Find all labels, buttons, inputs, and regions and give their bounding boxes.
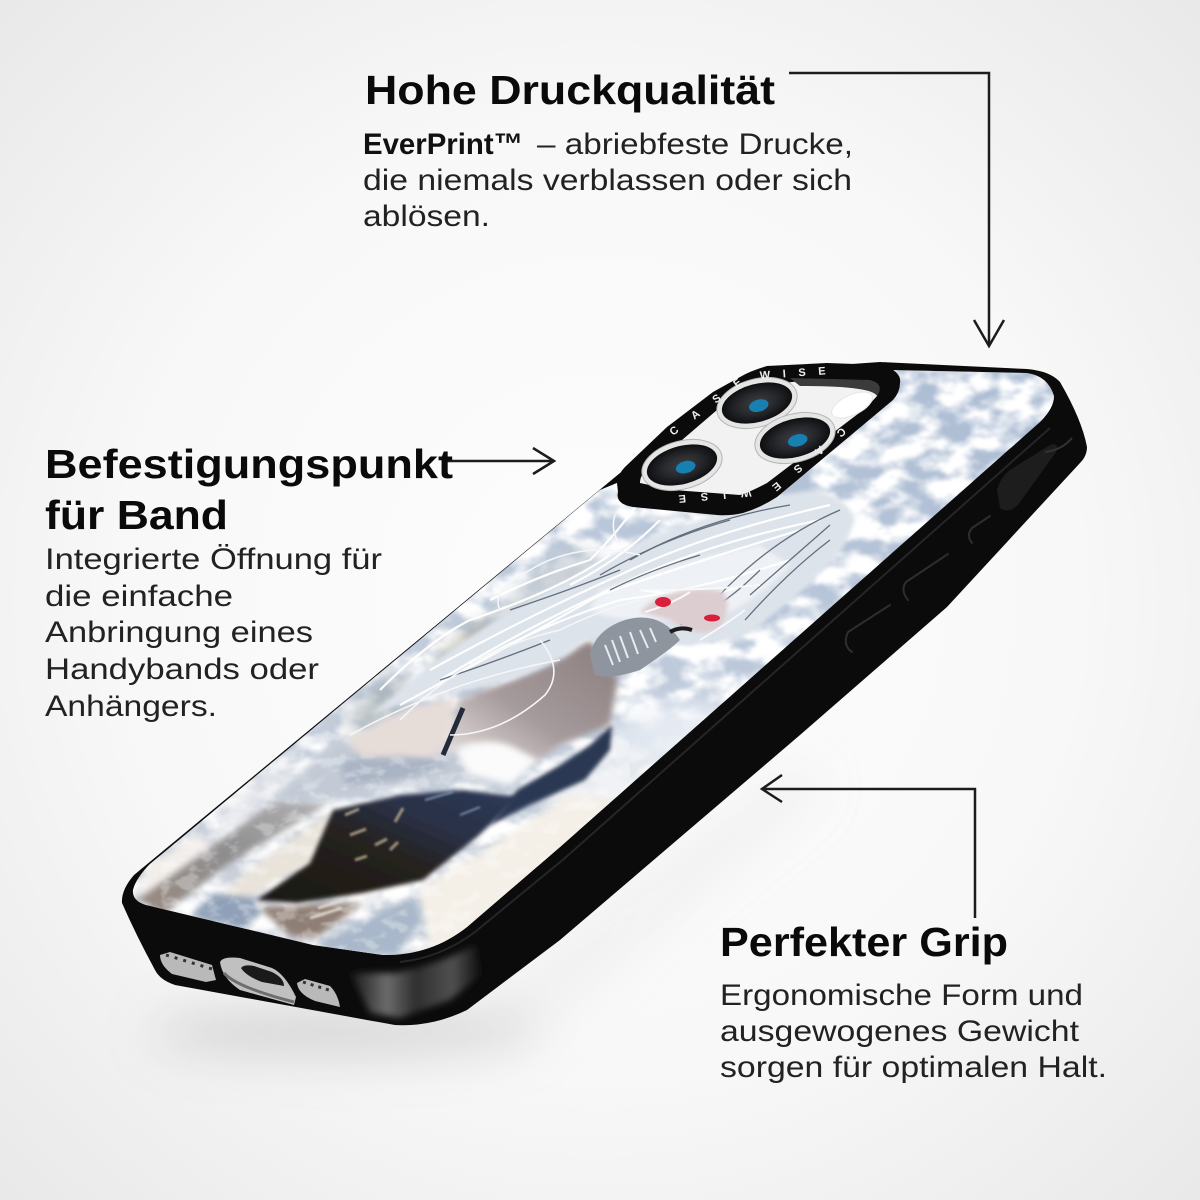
snowy background [120, 360, 1070, 970]
camera plate [640, 381, 878, 495]
fur highlight [455, 742, 538, 785]
description: die einfache [45, 580, 233, 613]
heading: Befestigungspunkt [45, 441, 453, 487]
phone shadow [150, 760, 820, 1056]
lower figure texture [130, 730, 630, 960]
heading [45, 441, 453, 538]
description [363, 128, 853, 233]
camera ring [617, 363, 900, 515]
phone case [122, 362, 1087, 1025]
case body [122, 362, 1087, 1025]
ring lettering top left: CASE [668, 376, 744, 438]
soft snow highlights [224, 543, 726, 828]
flash [828, 387, 876, 423]
skirt glints [310, 792, 480, 918]
speaker grille left [160, 952, 216, 982]
description: die niemals verblassen oder sich [363, 164, 852, 197]
description [45, 543, 382, 723]
lens left [636, 431, 728, 499]
top corner reflection [1045, 438, 1072, 452]
description: Ergonomische Form und [720, 979, 1083, 1012]
torso [438, 640, 618, 765]
description: Handybands oder [45, 653, 319, 686]
callout: strap mount [45, 441, 453, 723]
plate inner shading [790, 378, 880, 396]
callout: grip [720, 919, 1107, 1084]
dark skirt [257, 790, 520, 903]
white fur trim [270, 740, 537, 803]
action button [997, 444, 1057, 510]
charging port [220, 958, 296, 1005]
navy side panel [490, 725, 612, 825]
description: Anhängers. [45, 690, 217, 723]
face mask [590, 618, 692, 677]
ring lettering lower right: CASE [770, 425, 848, 493]
description: – abriebfeste Drucke, [537, 128, 853, 161]
lens top [711, 369, 803, 437]
callout: print quality [363, 67, 853, 233]
strap [443, 708, 463, 755]
ring lettering bottom: WISE [678, 486, 752, 504]
heading: Hohe Druckqualität [365, 67, 775, 113]
heading: Perfekter Grip [720, 919, 1008, 965]
lens right [749, 404, 841, 472]
snow under skirt [135, 795, 620, 955]
phone artwork [120, 360, 1070, 970]
arrow: top print quality [789, 73, 1004, 346]
heading: für Band [45, 492, 228, 538]
left hair wisps [350, 515, 640, 735]
arrow: strap mount [447, 448, 554, 474]
dark hair lines [440, 505, 840, 680]
description: Integrierte Öffnung für [45, 543, 382, 576]
volume and side buttons [846, 516, 990, 652]
description: EverPrint™ [363, 128, 523, 161]
arm [345, 697, 455, 757]
description: Anbringung eines [45, 616, 313, 649]
hair over face [640, 585, 760, 640]
arrow: grip [762, 775, 975, 918]
ring lettering top right: WISE [759, 365, 826, 382]
description: sorgen für optimalen Halt. [720, 1051, 1107, 1084]
description [720, 979, 1107, 1084]
hair mass [370, 490, 855, 715]
description: ausgewogenes Gewicht [720, 1015, 1080, 1048]
camera module [617, 363, 900, 515]
lower left streaks [137, 800, 423, 955]
description: ablösen. [363, 200, 490, 233]
speaker grille right [297, 979, 340, 1007]
bottom corner sheen [350, 945, 481, 1018]
red eyes [655, 597, 720, 622]
side edge highlight [400, 428, 1050, 962]
hair strands [380, 500, 830, 705]
face [640, 589, 728, 632]
